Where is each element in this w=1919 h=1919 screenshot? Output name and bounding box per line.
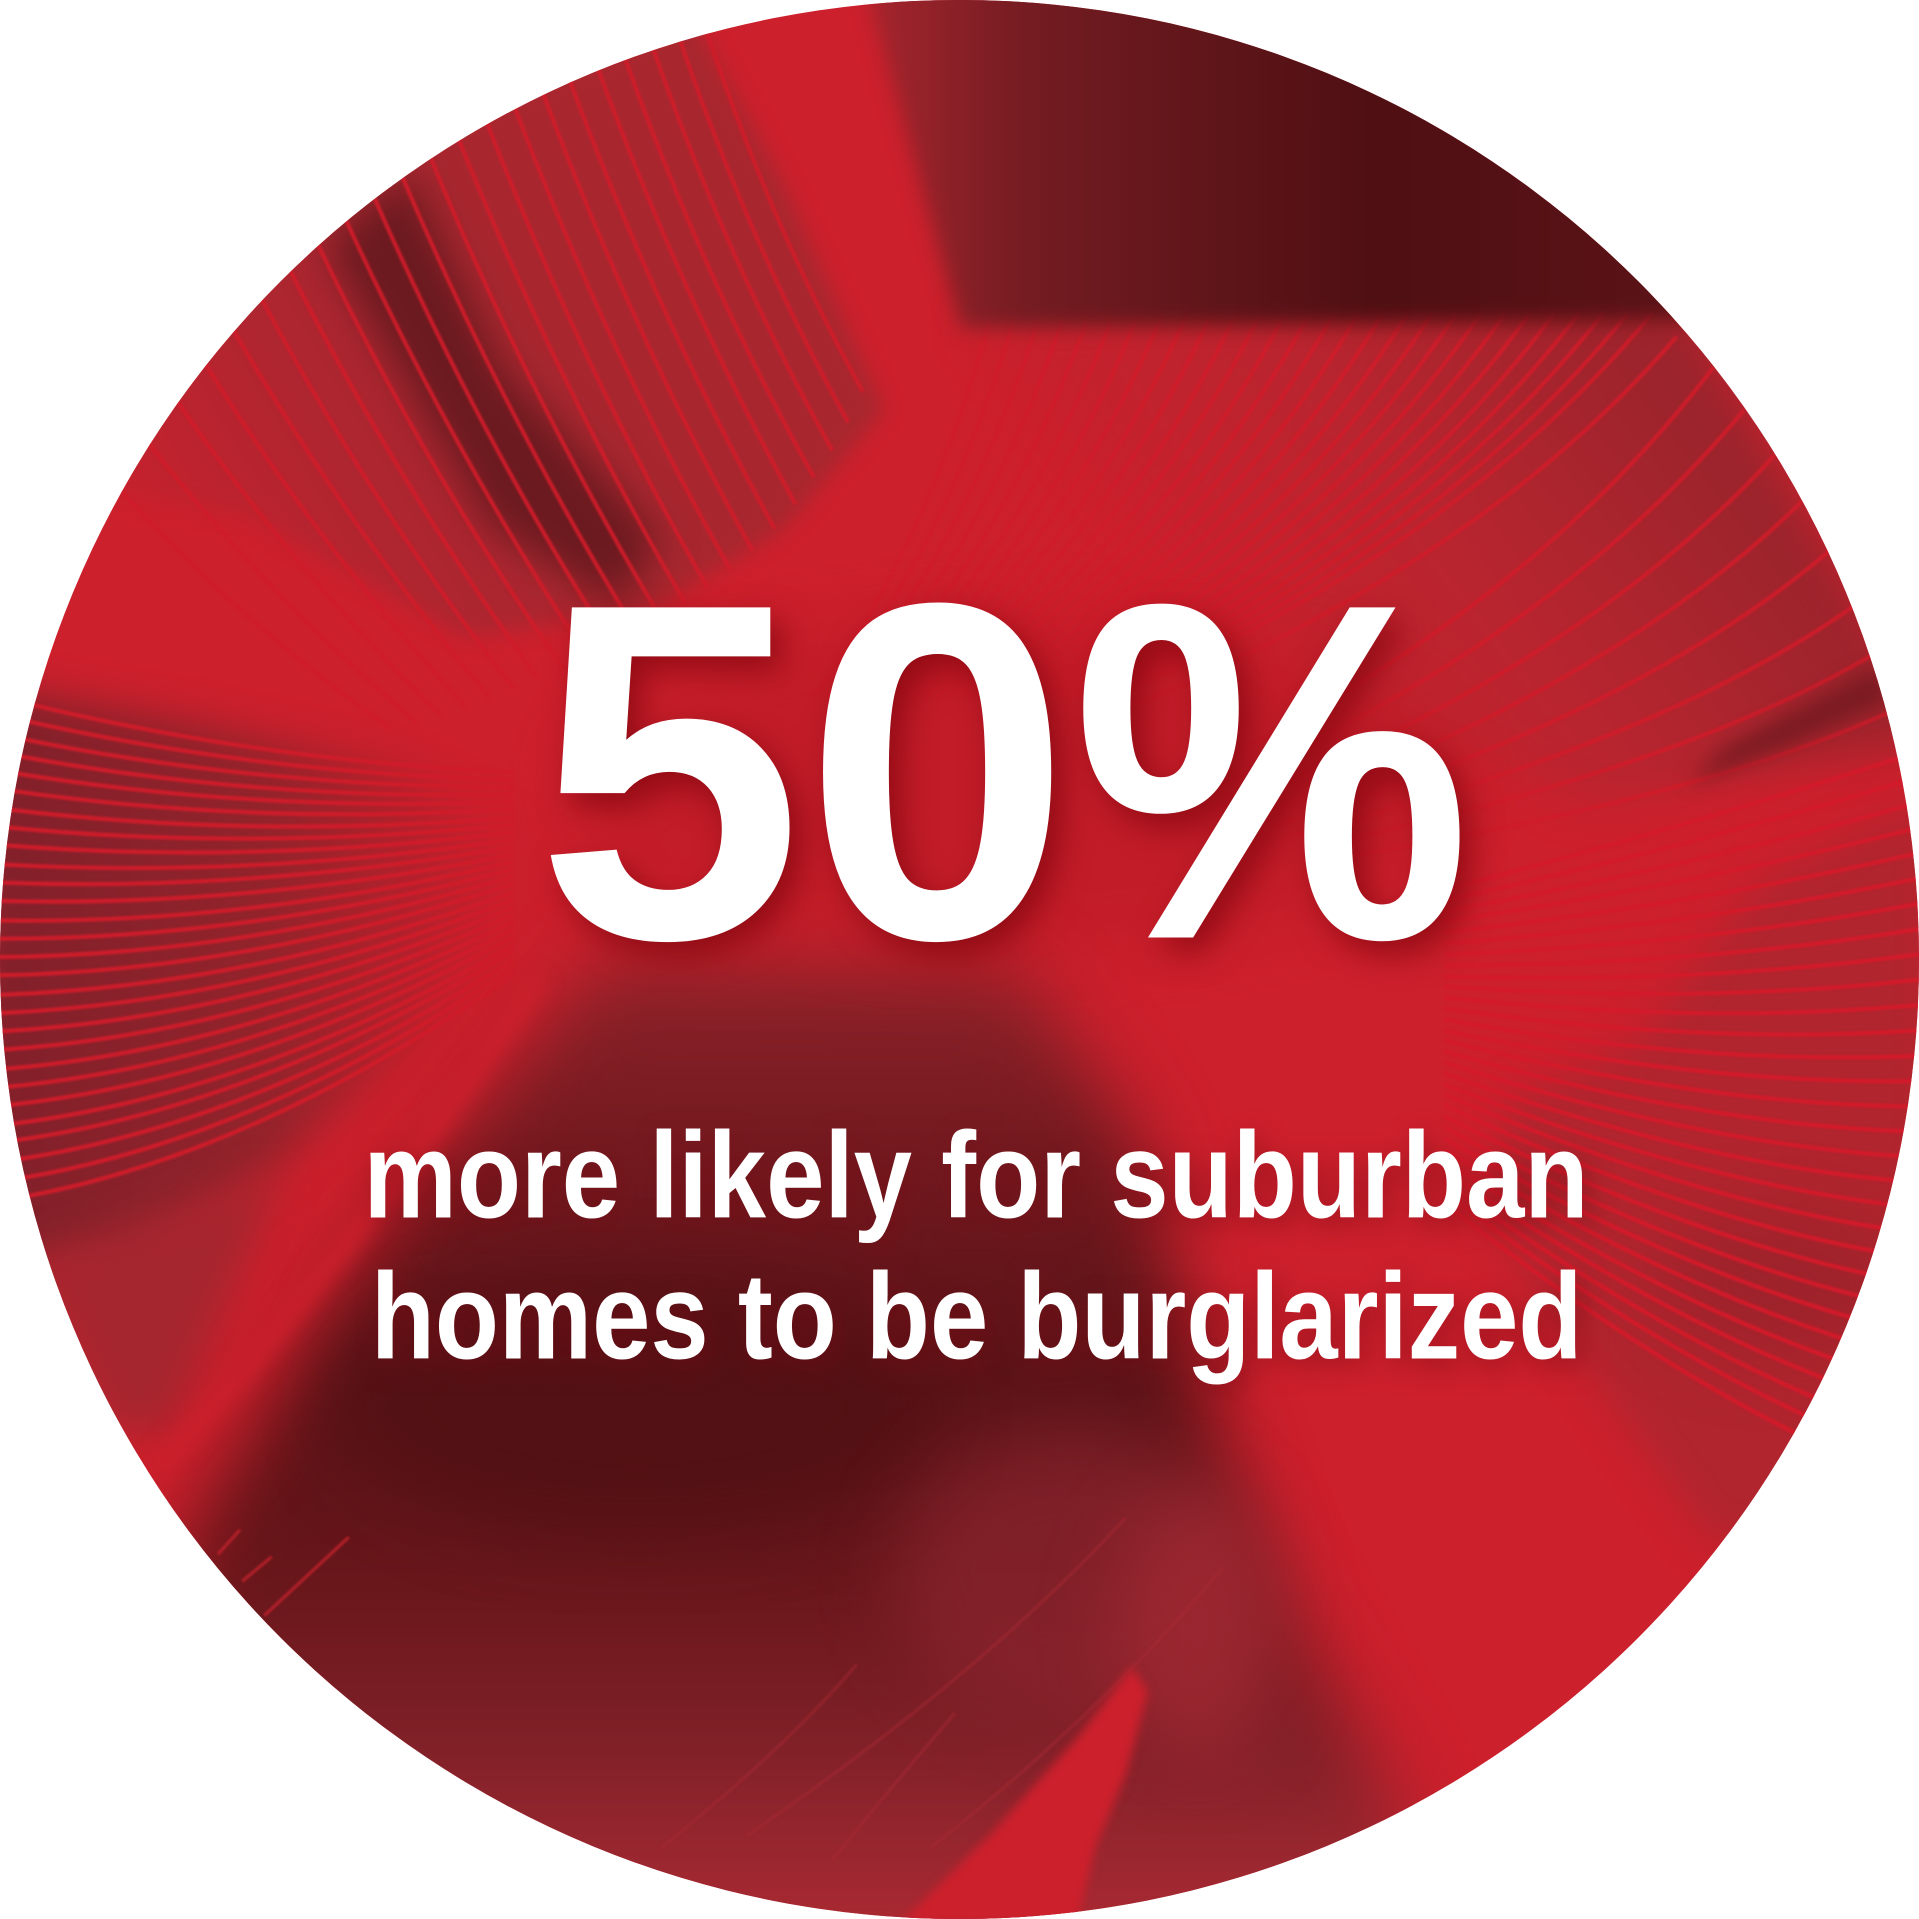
darkest blob bbox=[384, 1286, 889, 1532]
lower right tinted region bbox=[1493, 796, 1919, 1542]
headline figure: 50% bbox=[536, 503, 1471, 1040]
caption line 1: more likely for suburban bbox=[363, 1107, 1589, 1244]
headline figure: 50%: 50 bbox=[536, 503, 1071, 1039]
lower middle tint bbox=[883, 1412, 1203, 1706]
right rim dark streak bbox=[1689, 667, 1891, 783]
upper right fan lines bbox=[1006, 315, 1888, 814]
left fan lines bbox=[0, 695, 514, 1202]
left dark band region bbox=[0, 685, 538, 1273]
soft haze behind figures bbox=[575, 624, 1456, 942]
right fan lines bbox=[1444, 747, 1919, 1492]
caption text bbox=[363, 1107, 1589, 1384]
central and bottom dark area bbox=[122, 961, 1456, 1919]
caption line 2: homes to be burglarized bbox=[371, 1247, 1582, 1384]
bottom right tint bbox=[1114, 1493, 1285, 1762]
left rim lower tint bbox=[24, 1175, 281, 1432]
lower left hatch lines bbox=[218, 1530, 349, 1615]
bottom faint streaks bbox=[672, 1518, 1149, 1839]
headline figure: 50%: % bbox=[1072, 504, 1471, 1040]
upper left fan lines bbox=[120, 33, 864, 645]
bottom red streak bbox=[900, 1667, 1148, 1919]
lower right darker patch bbox=[1652, 1218, 1897, 1352]
upper left dark band bbox=[324, 171, 661, 606]
upper left streaked region bbox=[73, 12, 884, 636]
top right dark block bbox=[863, 0, 1762, 328]
upper right streaked region bbox=[1077, 297, 1900, 806]
diagonal red streak left of dark area bbox=[153, 979, 538, 1475]
